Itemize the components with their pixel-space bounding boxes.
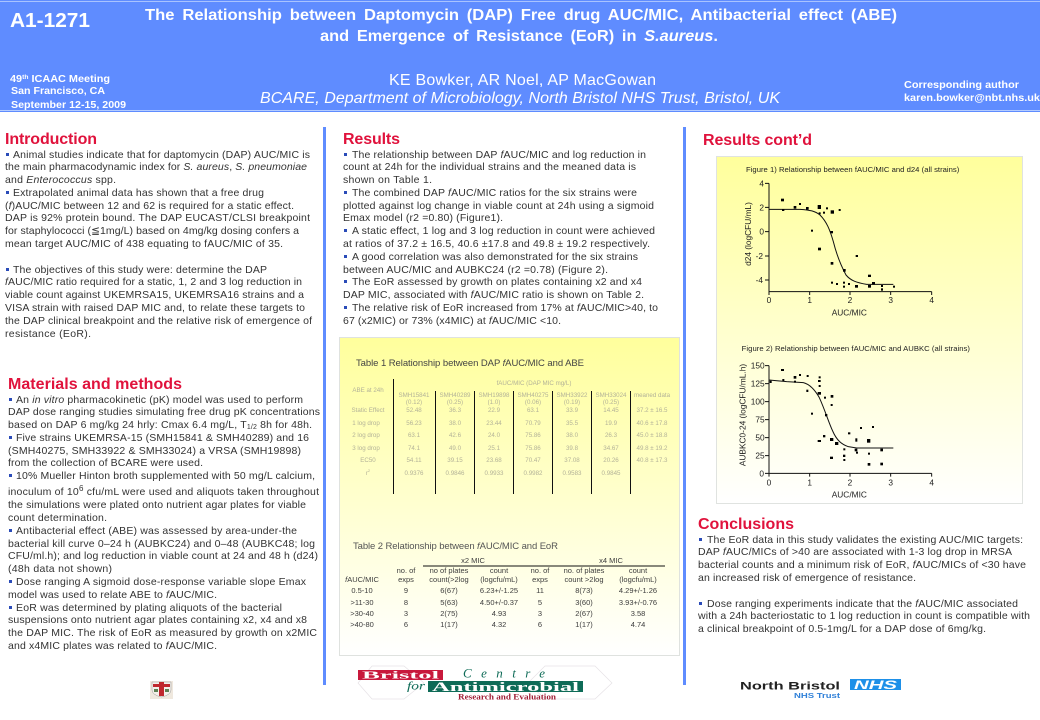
meeting details: September 12-15, 2009 (11, 99, 126, 111)
chart: figure 1: 1 (807, 295, 812, 305)
text: results: The relative risk of EoR increased from 17% at fAUC/MIC>40, to (352, 302, 658, 314)
table 2: (logcfu/mL) (619, 575, 657, 584)
table 1: SMH40275 (518, 392, 549, 399)
table 1 (352, 358, 671, 494)
table 1: SMH33024 (596, 392, 627, 399)
text: results (343, 149, 658, 327)
table 2: 4.74 (631, 620, 645, 629)
text: introduction: viable count against UKEMRSA15, UKEMRSA16 strains and a (5, 289, 304, 301)
text: introduction: mean target AUC/MIC of 438 equating to fAUC/MIC of 35. (5, 238, 283, 250)
table 2: count(>2log (429, 575, 469, 584)
table 1: 1 log drop (352, 420, 380, 427)
table 1: (0.12) (406, 399, 422, 406)
chart: figure 2: 25 (755, 451, 765, 461)
table 1: SMH33922 (557, 392, 588, 399)
chart: figure 1: Figure 1) Relationship between fAUC/MIC and d24 (all strains) (746, 165, 960, 174)
text: introduction: the main pharmacodynamic index for S. aureus, S. pneumoniae (5, 161, 307, 173)
text: materials and methods: based on DAP 6 mg/kg 24 hrly: Cmax 6.4 mg/L, T (8, 419, 247, 431)
table 2: no. of (531, 566, 550, 575)
logo: Bristol Centre for Antimicrobial Research and Evaluation: Antimicrobial (432, 680, 580, 694)
chart: figure 2: 3 (888, 478, 893, 488)
text: materials and methods: the DAP MIC. The risk of EoR as measured by growth on x2MIC (8, 627, 317, 639)
table 1: 49.8 ± 19.2 (637, 445, 668, 452)
text: results: The relationship between DAP fAUC/MIC and log reduction in (352, 149, 646, 161)
text: introduction: VISA strain with raised DAP MIC and, to relate these targets to (5, 302, 305, 314)
text: results: between AUC/MIC and AUBKC24 (r2 =0.78) (Figure 2). (343, 264, 608, 276)
table 1: 14.45 (603, 407, 619, 414)
text: materials and methods: 6 (79, 484, 84, 493)
text: results: at ratios of 37.2 ± 16.5, 40.6 ±17.8 and 49.8 ± 19.2 respectively. (343, 238, 650, 250)
logo: Bristol Centre for Antimicrobial Research and Evaluation: Research and Evaluation (458, 692, 557, 702)
text: results: A good correlation was also demonstrated for the six strains (352, 251, 638, 263)
heading: results: Results (343, 131, 400, 148)
panel: figures (716, 156, 1022, 504)
table 1: 24.0 (488, 432, 501, 439)
table 2: count (629, 566, 648, 575)
text: materials and methods: 8h for 48h. (257, 419, 312, 431)
text: materials and methods: 10% Mueller Hinton broth supplemented with 50 mg/L calcium, (16, 470, 315, 482)
table 2: 6 (538, 620, 542, 629)
table 2: 5(63) (440, 598, 458, 607)
logo: Bristol Centre for Antimicrobial Research and Evaluation: Bristol (362, 670, 440, 682)
text: results: DAP MIC, associated with fAUC/MIC ratio is shown on Table 2. (343, 289, 644, 301)
table 1: 54.11 (406, 457, 422, 464)
text: conclusions: Dose ranging experiments indicate that the fAUC/MIC associated (707, 598, 1018, 610)
table 1: EC50 (360, 457, 376, 464)
chart: figure 1: d24 (logCFU/mL) (743, 202, 753, 266)
table 1: Static Effect (352, 407, 385, 414)
text: introduction: DAP is 92% protein bound. The DAP EUCAST/CLSI breakpoint (5, 212, 310, 224)
table 2: 6 (404, 620, 408, 629)
table 1: (0.06) (525, 399, 541, 406)
table 1: 0.9982 (524, 470, 543, 477)
text: results: shown on Table 1. (343, 174, 432, 186)
meeting details: 49 (10, 73, 22, 85)
chart: figure 1: 2 (759, 202, 764, 212)
table 1: 38.0 (566, 432, 579, 439)
table 2: 1(17) (440, 620, 458, 629)
table 2: (logcfu/mL) (480, 575, 518, 584)
meeting details (10, 73, 126, 111)
table 1: 36.3 (449, 407, 462, 414)
table 2: 4.50+/-0.37 (480, 598, 518, 607)
table 1: 49.0 (449, 445, 462, 452)
text: results: count at 24h for the individual strains and the meaned data is (343, 161, 636, 173)
table 1: (1.0) (488, 399, 500, 406)
corresponding author: karen.bowker@nbt.nhs.uk (904, 92, 1040, 104)
table 2: Table 2 Relationship between fAUC/MIC and EoR (353, 541, 558, 552)
chart: figure 2: 0 (767, 478, 772, 488)
chart: figure 1: 0 (759, 227, 764, 237)
table 1: 0.9933 (485, 470, 504, 477)
table 1: 39.15 (447, 457, 463, 464)
text: conclusions: with a 24h bacteriostatic to 1 log reduction in count is compatible with (697, 610, 1030, 622)
chart: figure 2: Figure 2) Relationship between fAUC/MIC and AUBKC (all strains) (742, 344, 970, 353)
text: conclusions: an increased risk of emergence of resistance. (698, 572, 916, 584)
table 1: 63.1 (408, 432, 421, 439)
text: materials and methods: Dose ranging A sigmoid dose-response variable slope Emax (16, 576, 307, 588)
table 1: 70.47 (525, 457, 541, 464)
table 2: 4.93 (492, 609, 506, 618)
table 2: 8(73) (575, 586, 593, 595)
text: conclusions: The EoR data in this study validates the existing AUC/MIC targets: (707, 534, 1023, 546)
table 1: SMH19898 (479, 392, 510, 399)
chart: figure 2: 1 (807, 478, 812, 488)
text: introduction: The objectives of this study were: determine the DAP (13, 264, 267, 276)
table 2: 9 (404, 586, 408, 595)
poster number: A1-1271 (10, 10, 90, 32)
text: conclusions: a clinical breakpoint of 0.5-1mg/L for a DAP dose of 6mg/kg. (698, 623, 986, 635)
text: results: Emax model (r2 =0.80) (Figure1). (343, 212, 503, 224)
text: results: 67 (x2MIC) or 73% (x4MIC) at fAUC/MIC <10. (343, 315, 561, 327)
table 1: Table 1 Relationship between DAP fAUC/MIC and ABE (356, 358, 584, 369)
table 2: count >2log (564, 575, 604, 584)
table 1: 45.0 ± 18.8 (637, 432, 668, 439)
text: introduction: and Enterococcus spp. (5, 174, 116, 186)
table 2: x4 MIC (599, 556, 623, 565)
chart: figure 2: 150 (751, 361, 765, 371)
text: materials and methods: count determination. (8, 512, 107, 524)
table 1: 70.79 (525, 420, 541, 427)
text: materials and methods: bacterial kill curve 0–24 h (AUBKC24) and 0–48 (AUBKC48; log (8, 538, 315, 550)
table 1: fAUC/MIC (DAP MIC mg/L) (497, 380, 571, 387)
logo: university crest (150, 681, 173, 699)
poster title: The Relationship between Daptomycin (DAP) Free drug AUC/MIC, Antibacterial effect (ABE) (145, 7, 897, 24)
text: materials and methods: model was used to relate ABE to fAUC/MIC. (8, 589, 217, 601)
table 1: (0.25) (447, 399, 463, 406)
text: materials and methods: the simulations were plated onto nutrient agar plates for viable (8, 499, 306, 511)
text: introduction: (f)AUC/MIC between 12 and 62 is required for a static effect. (5, 200, 294, 212)
text: materials and methods: and x4MIC plates was related to fAUC/MIC. (8, 640, 217, 652)
text: conclusions: bacterial counts and a minimum risk of EoR, fAUC/MICs of <30 have (698, 559, 1026, 571)
chart: figure 2: 50 (755, 433, 765, 443)
logo: North Bristol NHS Trust: NHS (854, 678, 897, 692)
table 2: x2 MIC (461, 556, 485, 565)
table 2: 0.5-10 (351, 586, 373, 595)
table 1: 39.8 (566, 445, 579, 452)
table 2: 3 (404, 609, 408, 618)
table 2: no of plates (430, 566, 469, 575)
text: materials and methods: Five strains UKEMRSA-15 (SMH15841 & SMH40289) and 16 (16, 432, 309, 444)
chart: figure 2: AUC/MIC (832, 489, 867, 499)
table 1: 33.9 (566, 407, 579, 414)
poster title: and Emergence of Resistance (EoR) in S.aureus. (320, 28, 718, 45)
text: materials and methods: CFU/ml.h); and log reduction in viable count at 24 and 48 h (d24) (8, 550, 318, 562)
text: introduction: for staphylococci (≦1mg/L) based on 4mg/kg dosing confers a (5, 225, 299, 237)
table 2: 6(67) (440, 586, 458, 595)
text: introduction: Extrapolated animal data has shown that a free drug (13, 187, 264, 199)
table 1: 40.8 ± 17.3 (637, 457, 668, 464)
text: materials and methods: cfu/mL were used and aliquots taken throughout (84, 486, 319, 498)
header banner (0, 0, 1040, 112)
chart: figure 2: 100 (751, 397, 765, 407)
chart: figure 1: 4 (759, 178, 764, 188)
table 2: 3(60) (575, 598, 593, 607)
text: materials and methods: DAP dose ranging studies simulating free drug pK concentrations (8, 406, 320, 418)
text: results: plotted against log change in viable count at 24h using a sigmoid (343, 200, 654, 212)
table 1: 22.9 (488, 407, 501, 414)
table 1: 26.3 (605, 432, 618, 439)
table 1: 0.9845 (602, 470, 621, 477)
table 1: SMH15841 (399, 392, 430, 399)
chart: figure 1: 4 (929, 295, 934, 305)
logo: North Bristol NHS Trust: North Bristol (740, 680, 840, 692)
text: materials and methods: suspensions onto nutrient agar plates containing x2, x4 and x8 (8, 614, 307, 626)
table 2: >30-40 (350, 609, 374, 618)
table 1: 74.1 (408, 445, 421, 452)
table 1: (0.19) (564, 399, 580, 406)
table 1: 20.26 (603, 457, 619, 464)
table 2: fAUC/MIC (345, 575, 379, 584)
table 2: >40-80 (350, 620, 374, 629)
heading: results continued: Results cont’d (703, 132, 812, 149)
table 1: 52.48 (406, 407, 422, 414)
table 1: 0.9583 (563, 470, 582, 477)
table 1: 19.9 (605, 420, 618, 427)
table 2: count (490, 566, 509, 575)
text: materials and methods: 1/2 (247, 424, 257, 431)
table 1: 56.23 (406, 420, 422, 427)
text: results: The EoR assessed by growth on plates containing x2 and x4 (352, 276, 642, 288)
table 1: 35.5 (566, 420, 579, 427)
heading: introduction: Introduction (5, 131, 97, 148)
chart: figure 2: 4 (929, 478, 934, 488)
table 1: 0.9846 (446, 470, 465, 477)
chart: figure 2: 0 (759, 468, 764, 478)
authors and affiliation: KE Bowker, AR Noel, AP MacGowan (389, 72, 656, 89)
table 1: SMH40289 (440, 392, 471, 399)
table 1: 75.86 (525, 445, 541, 452)
panel: tables (340, 338, 680, 656)
text: introduction: resistance (EoR). (5, 328, 91, 340)
meeting details: th (22, 74, 28, 81)
table 1: 23.68 (486, 457, 502, 464)
heading: materials and methods: Materials and methods (8, 376, 182, 393)
text: results: The combined DAP fAUC/MIC ratios for the six strains were (352, 187, 637, 199)
meeting details: San Francisco, CA (11, 85, 105, 97)
chart: figure 2: 125 (751, 379, 765, 389)
table 2: 8 (404, 598, 408, 607)
text: introduction (5, 149, 312, 340)
table 1: meaned data (634, 392, 671, 399)
table 1: r (366, 470, 368, 477)
table 1: 37.08 (564, 457, 580, 464)
meeting details: ICAAC Meeting (28, 73, 110, 85)
table 2: no. of plates (564, 566, 605, 575)
table 1: 34.67 (603, 445, 619, 452)
corresponding author: Corresponding author (904, 79, 1019, 91)
table 2: >11-30 (350, 598, 374, 607)
text: conclusions: DAP fAUC/MICs of >40 are associated with 1-3 log drop in MRSA (698, 546, 1012, 558)
chart: figure 1: 2 (848, 295, 853, 305)
table 1: 2 (368, 468, 371, 473)
authors and affiliation (260, 72, 781, 107)
text: materials and methods: inoculum of 10 (8, 486, 79, 498)
text: materials and methods: (SMH40275, SMH33922 & SMH33024) a VRSA (SMH19898) (8, 445, 301, 457)
table 2: 4.29+/-1.26 (619, 586, 657, 595)
text: materials and methods (8, 394, 320, 652)
chart: figure 2 (737, 344, 970, 499)
table 2: 3 (538, 609, 542, 618)
table 2: 5 (538, 598, 542, 607)
table 2: 1(17) (575, 620, 593, 629)
table 2: 3.93+/-0.76 (619, 598, 657, 607)
chart: figure 2: 2 (848, 478, 853, 488)
poster title (145, 7, 897, 45)
chart: figure 1 (743, 165, 960, 318)
authors and affiliation: BCARE, Department of Microbiology, North Bristol NHS Trust, Bristol, UK (260, 90, 781, 107)
table 2: 2(67) (575, 609, 593, 618)
table 1: 38.0 (449, 420, 462, 427)
text: introduction: the DAP clinical breakpoint and the relative risk of emergence of (5, 315, 312, 327)
text: materials and methods: An in vitro pharmacokinetic (pK) model was used to perform (16, 394, 303, 406)
table 1: 2 log drop (352, 432, 380, 439)
table 1: 25.1 (488, 445, 501, 452)
table 2: exps (532, 575, 548, 584)
text: materials and methods: Antibacterial effect (ABE) was assessed by area-under-the (16, 525, 297, 537)
table 2: 11 (536, 586, 544, 595)
heading: conclusions: Conclusions (698, 516, 794, 533)
logo: Bristol Centre for Antimicrobial Research and Evaluation (358, 666, 612, 702)
chart: figure 1: -4 (756, 275, 763, 285)
logo: North Bristol NHS Trust: NHS Trust (794, 691, 841, 700)
text: conclusions (697, 534, 1030, 635)
text: materials and methods: EoR was determined by plating aliquots of the bacterial (16, 602, 282, 614)
table 1: 63.1 (527, 407, 540, 414)
table 1: 75.86 (525, 432, 541, 439)
logo: Bristol Centre for Antimicrobial Research and Evaluation: Centre (463, 666, 545, 680)
table 1: 3 log drop (352, 445, 380, 452)
table 1: 40.6 ± 17.8 (637, 420, 668, 427)
table 1: ABE at 24h (352, 387, 384, 394)
table 1: 23.44 (486, 420, 502, 427)
chart: figure 2: AUBKC0-24 (logCFU/mL.h) (737, 364, 747, 466)
chart: figure 1: AUC/MIC (832, 308, 867, 318)
table 2 (345, 541, 665, 629)
table 1: 0.9376 (405, 470, 424, 477)
table 2: exps (398, 575, 414, 584)
chart: figure 1: 3 (888, 295, 893, 305)
text: results: A static effect, 1 log and 3 log reduction in count were achieved (352, 225, 655, 237)
text: materials and methods: (48h data not shown) (8, 563, 112, 575)
table 2: no. of (397, 566, 416, 575)
table 1: 42.6 (449, 432, 462, 439)
chart: figure 2: 75 (755, 415, 765, 425)
table 2: 4.32 (492, 620, 506, 629)
logo: North Bristol NHS Trust (740, 678, 901, 700)
text: introduction: fAUC/MIC ratio required for a static, 1, 2 and 3 log reduction in (5, 276, 302, 288)
table 1: (0.25) (603, 399, 619, 406)
text: materials and methods: from the collection of BCARE were used. (8, 457, 203, 469)
table 1: 37.2 ± 16.5 (637, 407, 668, 414)
text: introduction: Animal studies indicate that for daptomycin (DAP) AUC/MIC is (13, 149, 310, 161)
table 2: 3.58 (631, 609, 645, 618)
table 2: 6.23+/-1.25 (480, 586, 518, 595)
chart: figure 1: -2 (756, 251, 763, 261)
corresponding author (904, 79, 1040, 104)
chart: figure 1: 0 (767, 295, 772, 305)
logo: Bristol Centre for Antimicrobial Research and Evaluation: for (407, 678, 425, 692)
table 2: 2(75) (440, 609, 458, 618)
